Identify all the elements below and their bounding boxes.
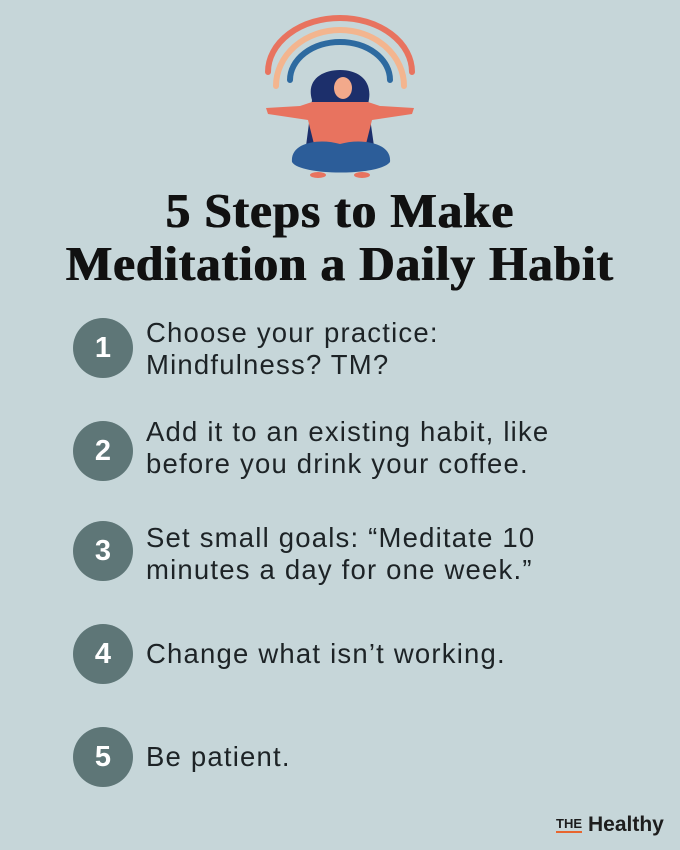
step 4: Change what isn’t working.	[146, 638, 506, 669]
title: Meditation a Daily Habit	[66, 236, 614, 291]
step 5	[73, 727, 291, 787]
step 1: 1	[95, 332, 111, 364]
logo: Healthy	[588, 813, 664, 836]
step 1	[73, 317, 439, 380]
step 5: Be patient.	[146, 741, 291, 772]
step 1: Choose your practice:	[146, 317, 439, 348]
title	[66, 183, 614, 291]
step 4	[73, 624, 506, 684]
step 2: Add it to an existing habit, like	[146, 416, 549, 447]
title: 5 Steps to Make	[166, 183, 514, 238]
step 1: Mindfulness? TM?	[146, 349, 389, 380]
step 3: Set small goals: “Meditate 10	[146, 522, 535, 553]
step 2: 2	[95, 435, 111, 467]
step 3	[73, 521, 535, 585]
step 4: 4	[95, 638, 111, 670]
logo: THE	[556, 816, 582, 831]
illustration: meditating woman with rainbow	[265, 15, 415, 178]
step 2	[73, 416, 549, 481]
step 2: before you drink your coffee.	[146, 448, 529, 479]
step 3: minutes a day for one week.”	[146, 554, 533, 585]
step 3: 3	[95, 535, 111, 567]
step 5: 5	[95, 741, 111, 773]
